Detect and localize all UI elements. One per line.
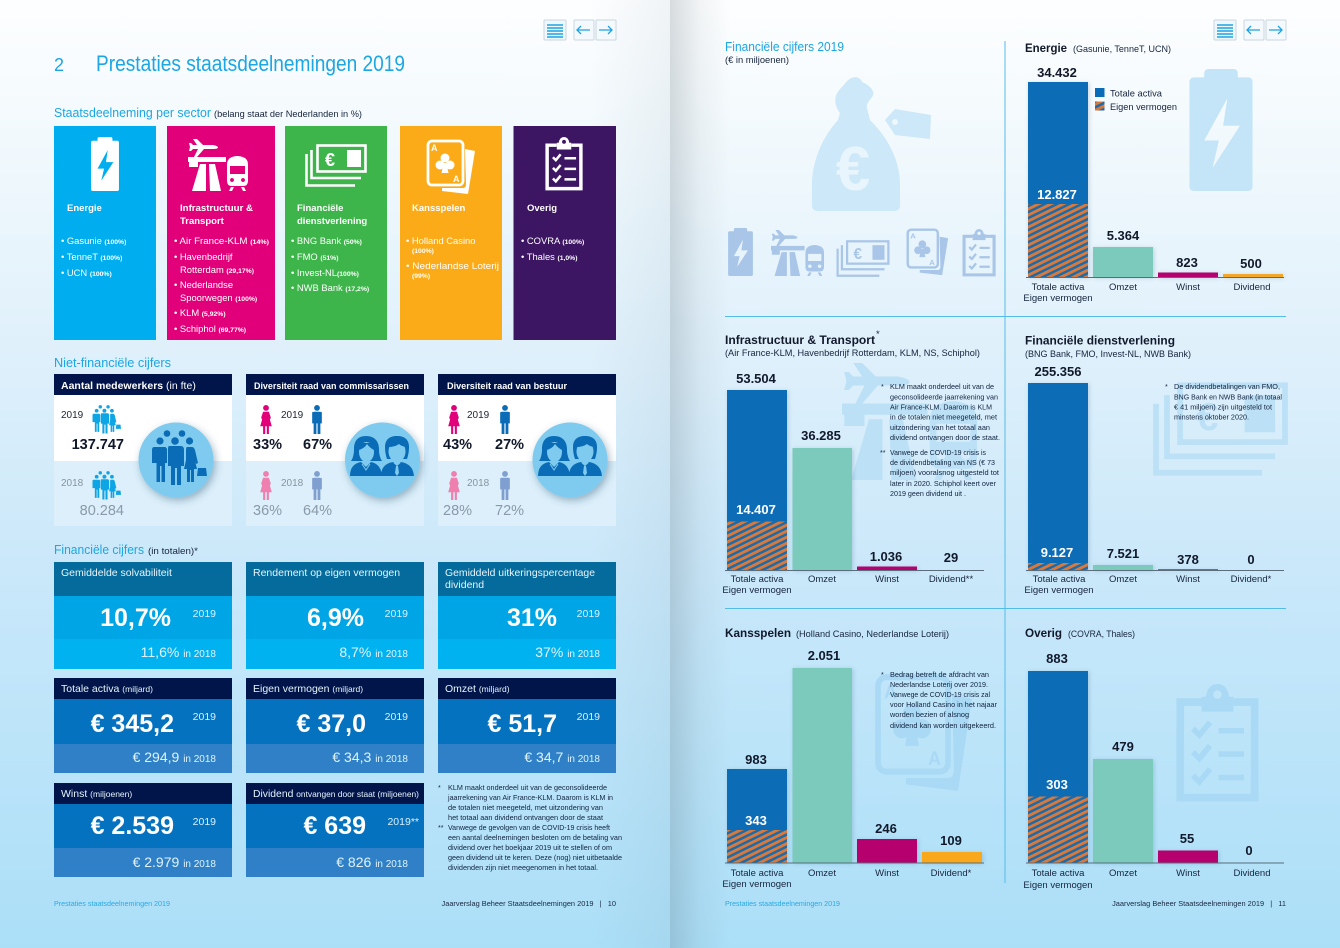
watermark: battery: [1189, 69, 1253, 191]
tile: gemiddelde solvabiliteit: 10,7%: [100, 604, 171, 632]
note: [880, 383, 1000, 498]
panel: diversiteit raad van commissarissen: Diversiteit raad van commissarissen: [254, 381, 409, 392]
note: **: [880, 449, 886, 457]
panel: diversiteit raad van commissarissen: 36%: [253, 503, 282, 519]
chart: Overig: 883: [1046, 651, 1068, 666]
tile: dividend: [246, 783, 424, 877]
section heading: sector: Staatsdeelneming per sector: [54, 105, 212, 120]
section heading: sector: [54, 105, 362, 120]
bars: [1028, 82, 1283, 277]
chart: Infrastructuur en Transport: Totale activa: [731, 574, 784, 585]
panel: Financiele dienstverlening: dienstverlening: [297, 216, 367, 227]
panel: Infrastructuur en Transport: Spoorwegen (100%): [180, 292, 257, 303]
panel: Kansspelen: • Holland Casino: [406, 235, 475, 246]
chart: Energie: Dividend: [1234, 282, 1270, 293]
panel: Infrastructuur en Transport: • KLM (5,92%): [174, 307, 226, 318]
chart: Overig: Dividend: [1234, 868, 1270, 879]
chart: Infrastructuur en Transport: Omzet: [808, 574, 836, 585]
tile: gemiddelde solvabiliteit: 2019: [193, 608, 216, 620]
chart: Overig: (COVRA, Thales): [1068, 629, 1135, 640]
tile: rendement op eigen vermogen: [246, 562, 424, 669]
note: [881, 671, 998, 730]
chart: Energie: Eigen vermogen: [1023, 293, 1093, 304]
tile: gemiddeld uitkeringspercentage dividend: [438, 562, 616, 669]
note: Vanwege de COVID-19 crisis zal: [890, 691, 990, 699]
tile: rendement op eigen vermogen: Rendement op eigen vermogen: [253, 567, 400, 579]
watermark: money: [1156, 385, 1285, 473]
note: BNG Bank en NWB Bank (in totaal: [1174, 394, 1282, 402]
chart: Financiele dienstverlening: 378: [1177, 552, 1199, 567]
tile: omzet: € 34,7 in 2018: [524, 749, 600, 765]
panel: Financiele dienstverlening: • FMO (51%): [291, 251, 338, 262]
section heading: financieel: [54, 542, 198, 557]
tile: winst: € 2.539: [91, 812, 174, 840]
panel: Infrastructuur en Transport: Transport: [180, 216, 225, 227]
panel: Energie: • Gasunie (100%): [61, 235, 126, 246]
tile: winst: Winst (miljoenen): [61, 788, 132, 800]
panel: Infrastructuur en Transport: [167, 126, 275, 340]
tile: winst: € 2.979 in 2018: [133, 854, 216, 870]
chart: Energie: 823: [1176, 255, 1198, 270]
panel: Financiele dienstverlening: • Invest-NL(100%): [291, 267, 359, 278]
note: *: [881, 383, 884, 391]
note: in de totalen niet meegeteld, met: [890, 414, 997, 422]
icon row: sectors: [728, 228, 994, 276]
panel: Kansspelen: (100%): [412, 248, 434, 255]
chart: Overig: 303: [1046, 777, 1068, 792]
panel: aantal medewerkers: 80.284: [80, 503, 124, 519]
watermark: cards: [878, 677, 972, 791]
note: Air France-KLM. Daarom is KLM: [890, 404, 992, 412]
chart: Infrastructuur en Transport: [722, 329, 1000, 596]
chart: Financiele dienstverlening: Totale activa: [1033, 574, 1086, 585]
panel: diversiteit raad van bestuur: 2019: [467, 410, 490, 421]
icon: plane, road and train: [188, 139, 248, 191]
panel: aantal medewerkers: 2018: [61, 478, 84, 489]
legend: [1095, 88, 1177, 113]
tile: omzet: € 51,7: [487, 710, 557, 738]
note: uitzondering van het totaal aan: [890, 424, 990, 432]
chart: Overig: Winst: [1176, 868, 1200, 879]
icon: clipboard: [547, 137, 581, 189]
icon: battery: [91, 137, 119, 191]
chart: Financiele dienstverlening: 7.521: [1107, 546, 1139, 561]
tile: winst: [54, 783, 232, 877]
footer left page: Jaarverslag Beheer Staatsdeelnemingen 2019 | 10: [442, 899, 616, 908]
chart: Energie: 12.827: [1037, 187, 1077, 202]
chart: Overig: Eigen vermogen: [1023, 880, 1093, 891]
footer right page: [725, 899, 1286, 908]
panel: Kansspelen: Kansspelen: [412, 203, 466, 214]
panel: diversiteit raad van commissarissen: 2019: [281, 410, 304, 421]
icon: employees circle: [138, 422, 214, 498]
footnotes left page: KLM maakt onderdeel uit van de geconsolideerde: [448, 784, 607, 792]
tile: rendement op eigen vermogen: 8,7% in 2018: [339, 644, 408, 660]
footnotes left page: [438, 784, 622, 872]
panel: Overig: [514, 126, 616, 340]
note: € 41 miljoen) zijn uitgesteld tot: [1174, 404, 1272, 412]
chart: Kansspelen: 246: [875, 821, 897, 836]
tile: rendement op eigen vermogen: 2019: [385, 608, 408, 620]
panel: Infrastructuur en Transport: • Nederlandse: [174, 279, 233, 290]
chart: Energie: 5.364: [1107, 228, 1140, 243]
section heading: niet-financieel: Niet-financiële cijfers: [54, 355, 171, 370]
chart: Infrastructuur en Transport: Infrastructuur & Transport: [725, 333, 875, 347]
legend: Totale activa: [1110, 88, 1163, 100]
tile: gemiddeld uitkeringspercentage dividend: 31%: [507, 604, 557, 632]
chart: Infrastructuur en Transport: 36.285: [801, 428, 841, 443]
section heading: financieel: (in totalen)*: [148, 546, 198, 557]
footnotes left page: **: [438, 824, 444, 832]
footnotes left page: dividend over het boekjaar 2019 uit te stellen of om: [448, 844, 612, 852]
chart: Financiele dienstverlening: Winst: [1176, 574, 1200, 585]
panel: Infrastructuur en Transport: Infrastructuur &: [180, 203, 253, 214]
page title: Prestaties staatsdeelnemingen 2019: [96, 51, 405, 76]
tile: dividend: 2019**: [387, 816, 419, 828]
footnotes left page: jaarrekening van Air France-KLM. Daarom is KLM in: [447, 794, 613, 802]
icon: banknotes: [306, 146, 366, 186]
tile: gemiddelde solvabiliteit: 11,6% in 2018: [141, 644, 216, 660]
chart: Infrastructuur en Transport: 29: [944, 550, 958, 565]
chart: Infrastructuur en Transport: 14.407: [736, 502, 776, 517]
panel: diversiteit raad van bestuur: 72%: [495, 503, 524, 519]
chart: Financiele dienstverlening: 255.356: [1034, 364, 1082, 379]
panel: Infrastructuur en Transport: • Havenbedrijf: [174, 251, 233, 262]
panel: diversiteit raad van bestuur: 43%: [443, 437, 472, 453]
tile: gemiddeld uitkeringspercentage dividend: 37% in 2018: [535, 644, 600, 660]
chart: Overig: Overig: [1025, 626, 1062, 640]
note: De dividendbetalingen van FMO,: [1174, 383, 1280, 391]
footer left page: [54, 899, 616, 908]
bars: [1028, 671, 1218, 862]
note: voor Holland Casino in het najaar: [890, 701, 998, 709]
panel: Kansspelen: (99%): [412, 273, 430, 280]
panel: aantal medewerkers: 137.747: [72, 437, 124, 453]
footnotes left page: de totalen niet meegeteld, met uitzondering van: [448, 804, 603, 812]
tile: eigen vermogen: [246, 678, 424, 773]
tile: totale activa: [54, 678, 232, 773]
tile: dividend: Dividend ontvangen door staat (miljoenen): [253, 788, 419, 800]
divider lines: [725, 41, 1286, 883]
note: minstens oktober 2020.: [1174, 414, 1249, 422]
legend: Eigen vermogen: [1110, 102, 1177, 113]
footer right page: Prestaties staatsdeelnemingen 2019: [725, 899, 840, 908]
chart: Energie: (Gasunie, TenneT, UCN): [1073, 44, 1171, 55]
panel: diversiteit raad van bestuur: 28%: [443, 503, 472, 519]
note: de dividendbetaling van NS (€ 73: [890, 459, 995, 467]
chart: Energie: Energie: [1025, 41, 1067, 55]
chart: Infrastructuur en Transport: Dividend**: [929, 574, 973, 585]
tile: gemiddeld uitkeringspercentage dividend: dividend: [445, 579, 484, 591]
note: miljoen) vooralsnog uitgesteld tot: [890, 469, 999, 477]
note: Nederlandse Loterij over 2019.: [890, 681, 988, 689]
panel: diversiteit raad van bestuur: Diversiteit raad van bestuur: [447, 381, 567, 392]
note: KLM maakt onderdeel uit van de: [890, 383, 994, 391]
watermark: transport: [842, 363, 977, 480]
tile: totale activa: € 294,9 in 2018: [133, 749, 216, 765]
note: *: [1165, 383, 1168, 391]
note: worden bezien of alsnog: [889, 711, 969, 719]
panel: Infrastructuur en Transport: • Air France-KLM (14%): [174, 235, 269, 246]
note: dividend kan worden uitgekeerd.: [890, 722, 996, 730]
panel: Infrastructuur en Transport: Rotterdam (29,17%): [180, 264, 254, 275]
chart: Kansspelen: Eigen vermogen: [722, 879, 792, 890]
panel: aantal medewerkers: [54, 374, 232, 526]
footnotes left page: Vanwege de gevolgen van de COVID-19 crisis heeft: [448, 824, 610, 832]
chart: Financiele dienstverlening: 0: [1247, 552, 1255, 567]
chart: Kansspelen: (Holland Casino, Nederlandse Loterij): [796, 629, 949, 640]
heading: financiele cijfers 2019: Financiële cijfers 2019: [725, 39, 844, 54]
panel: diversiteit raad van commissarissen: 67%: [303, 437, 332, 453]
note: [1165, 383, 1282, 422]
chart: Overig: 0: [1245, 843, 1253, 858]
panel: Financiele dienstverlening: Financiële: [297, 203, 343, 214]
note: later in 2020. Schiphol keert over: [890, 480, 997, 488]
navigation buttons left page: [544, 20, 616, 40]
panel: Kansspelen: [400, 126, 502, 340]
chart: Energie: [1023, 41, 1284, 304]
chart: Financiele dienstverlening: Financiële dienstverlening: [1025, 334, 1175, 348]
tile: winst: 2019: [193, 816, 216, 828]
chart: Overig: 55: [1180, 831, 1194, 846]
icon: money bag watermark: €: [836, 135, 870, 204]
tile: eigen vermogen: € 34,3 in 2018: [332, 749, 408, 765]
tile: dividend: € 826 in 2018: [336, 854, 408, 870]
icon: employees 2019: [93, 405, 121, 433]
chart: Energie: Omzet: [1109, 282, 1137, 293]
panel: Energie: • UCN (100%): [61, 267, 112, 278]
note: geconsolideerde jaarrekening van: [890, 394, 998, 402]
section heading: financieel: Financiële cijfers: [54, 542, 144, 557]
note: dividend ontvangen door de staat.: [890, 434, 1000, 442]
chart: Kansspelen: Winst: [875, 868, 899, 879]
chart: Financiele dienstverlening: Omzet: [1109, 574, 1137, 585]
chart: Financiele dienstverlening: Eigen vermogen: [1024, 585, 1094, 596]
page title: 2: [54, 55, 64, 75]
tile: gemiddeld uitkeringspercentage dividend: 2019: [577, 608, 600, 620]
note: Bedrag betreft de afdracht van: [890, 671, 989, 679]
panel: Energie: [54, 126, 156, 340]
panel: Kansspelen: • Nederlandse Loterij: [406, 260, 499, 271]
chart: Financiele dienstverlening: (BNG Bank, FMO, Invest-NL, NWB Bank): [1025, 349, 1191, 360]
tile: gemiddeld uitkeringspercentage dividend: Gemiddeld uitkeringspercentage: [445, 567, 595, 579]
tile: totale activa: 2019: [193, 711, 216, 723]
chart: Infrastructuur en Transport: Eigen vermogen: [722, 585, 792, 596]
chart: Financiele dienstverlening: Dividend*: [1231, 574, 1272, 585]
tile: totale activa: Totale activa (miljard): [61, 683, 153, 695]
footnotes left page: het totaal aan dividend ontvangen door de staat: [448, 814, 603, 822]
panel: Overig: • Thales (1,0%): [521, 251, 578, 262]
chart: Kansspelen: Totale activa: [731, 868, 784, 879]
footnotes left page: *: [438, 784, 441, 792]
panel: Overig: • COVRA (100%): [521, 235, 584, 246]
chart: Infrastructuur en Transport: 1.036: [870, 549, 902, 564]
watermark: clipboard: [1180, 684, 1255, 798]
panel: diversiteit raad van commissarissen: 33%: [253, 437, 282, 453]
footnotes left page: een aantal deelnemingen besloten om de betaling van: [448, 834, 622, 842]
icon: directors circle: [532, 422, 608, 498]
footnotes left page: geen dividend uit te keren. Deze (nog) niet uitbetaalde: [448, 854, 622, 862]
tile: gemiddelde solvabiliteit: [54, 562, 232, 669]
panel: diversiteit raad van bestuur: 27%: [495, 437, 524, 453]
panel: Overig: Overig: [527, 203, 557, 214]
heading: financiele cijfers 2019: (€ in miljoenen): [725, 55, 789, 66]
chart: Kansspelen: Kansspelen: [725, 626, 791, 640]
panel: aantal medewerkers: Aantal medewerkers (in fte): [61, 380, 196, 392]
chart: Financiele dienstverlening: 9.127: [1041, 545, 1073, 560]
chart: Overig: [1023, 626, 1284, 891]
footer left page: Prestaties staatsdeelnemingen 2019: [54, 899, 170, 908]
tile: gemiddelde solvabiliteit: Gemiddelde solvabiliteit: [61, 567, 172, 579]
icon: playing cards: [428, 141, 475, 194]
chart: Infrastructuur en Transport: 53.504: [736, 371, 777, 386]
panel: diversiteit raad van bestuur: 2018: [467, 478, 490, 489]
panel: Infrastructuur en Transport: • Schiphol (69,77%): [174, 323, 246, 334]
chart: Kansspelen: 109: [940, 833, 962, 848]
icon: money bag watermark: [812, 77, 931, 211]
panel: Financiele dienstverlening: • BNG Bank (50%): [291, 235, 362, 246]
tile: totale activa: € 345,2: [91, 710, 174, 738]
tile: omzet: 2019: [577, 711, 600, 723]
bars: [727, 390, 917, 570]
chart: Energie: 500: [1240, 256, 1262, 271]
panel: Financiele dienstverlening: [285, 126, 387, 340]
note: 2019 geen dividend uit .: [890, 490, 966, 498]
chart: Infrastructuur en Transport: Winst: [875, 574, 899, 585]
chart: Kansspelen: Omzet: [808, 868, 836, 879]
icon: board members circle: [345, 422, 420, 498]
chart: Overig: Totale activa: [1032, 868, 1085, 879]
tile: eigen vermogen: € 37,0: [296, 710, 366, 738]
panel: diversiteit raad van commissarissen: 2018: [281, 478, 304, 489]
tile: omzet: [438, 678, 616, 773]
chart: Energie: 34.432: [1037, 65, 1077, 80]
chart: Kansspelen: 983: [745, 752, 767, 767]
chart: Energie: Winst: [1176, 282, 1200, 293]
chart: Infrastructuur en Transport: *: [876, 329, 880, 340]
chart: Kansspelen: 343: [745, 813, 767, 828]
chart: Overig: Omzet: [1109, 868, 1137, 879]
panel: Financiele dienstverlening: • NWB Bank (17,2%): [291, 282, 369, 293]
navigation buttons right page: [1214, 20, 1286, 40]
bars: [1028, 383, 1218, 570]
tile: dividend: € 639: [303, 812, 366, 840]
section heading: sector: (belang staat der Nederlanden in %): [214, 109, 362, 120]
panel: diversiteit raad van commissarissen: [246, 374, 424, 526]
footnotes left page: dividenden zijn niet meegenomen in het totaal.: [448, 864, 598, 872]
bars: [727, 668, 982, 862]
note: *: [881, 671, 884, 679]
panel: diversiteit raad van commissarissen: 64%: [303, 503, 332, 519]
icon: employees 2018: [93, 471, 121, 499]
note: Vanwege de COVID-19 crisis is: [890, 449, 986, 457]
heading: financiele cijfers 2019: [725, 39, 844, 66]
panel: Energie: • TenneT (100%): [61, 251, 122, 262]
chart: Financiele dienstverlening: [1024, 334, 1285, 596]
panel: Energie: Energie: [67, 203, 102, 214]
tile: omzet: Omzet (miljard): [445, 683, 510, 695]
chart: Infrastructuur en Transport: (Air France-KLM, Havenbedrijf Rotterdam, KLM, NS, Schiphol): [725, 348, 980, 359]
panel: diversiteit raad van bestuur: [438, 374, 616, 526]
tile: rendement op eigen vermogen: 6,9%: [307, 604, 364, 632]
panel: aantal medewerkers: 2019: [61, 410, 84, 421]
footer right page: Jaarverslag Beheer Staatsdeelnemingen 2019 | 11: [1112, 899, 1286, 908]
chart: Kansspelen: Dividend*: [931, 868, 972, 879]
chart: Kansspelen: [722, 626, 998, 890]
chart: Overig: 479: [1112, 739, 1134, 754]
chart: Kansspelen: 2.051: [808, 648, 840, 663]
chart: Energie: Totale activa: [1032, 282, 1085, 293]
tile: eigen vermogen: 2019: [385, 711, 408, 723]
tile: eigen vermogen: Eigen vermogen (miljard): [253, 683, 363, 695]
